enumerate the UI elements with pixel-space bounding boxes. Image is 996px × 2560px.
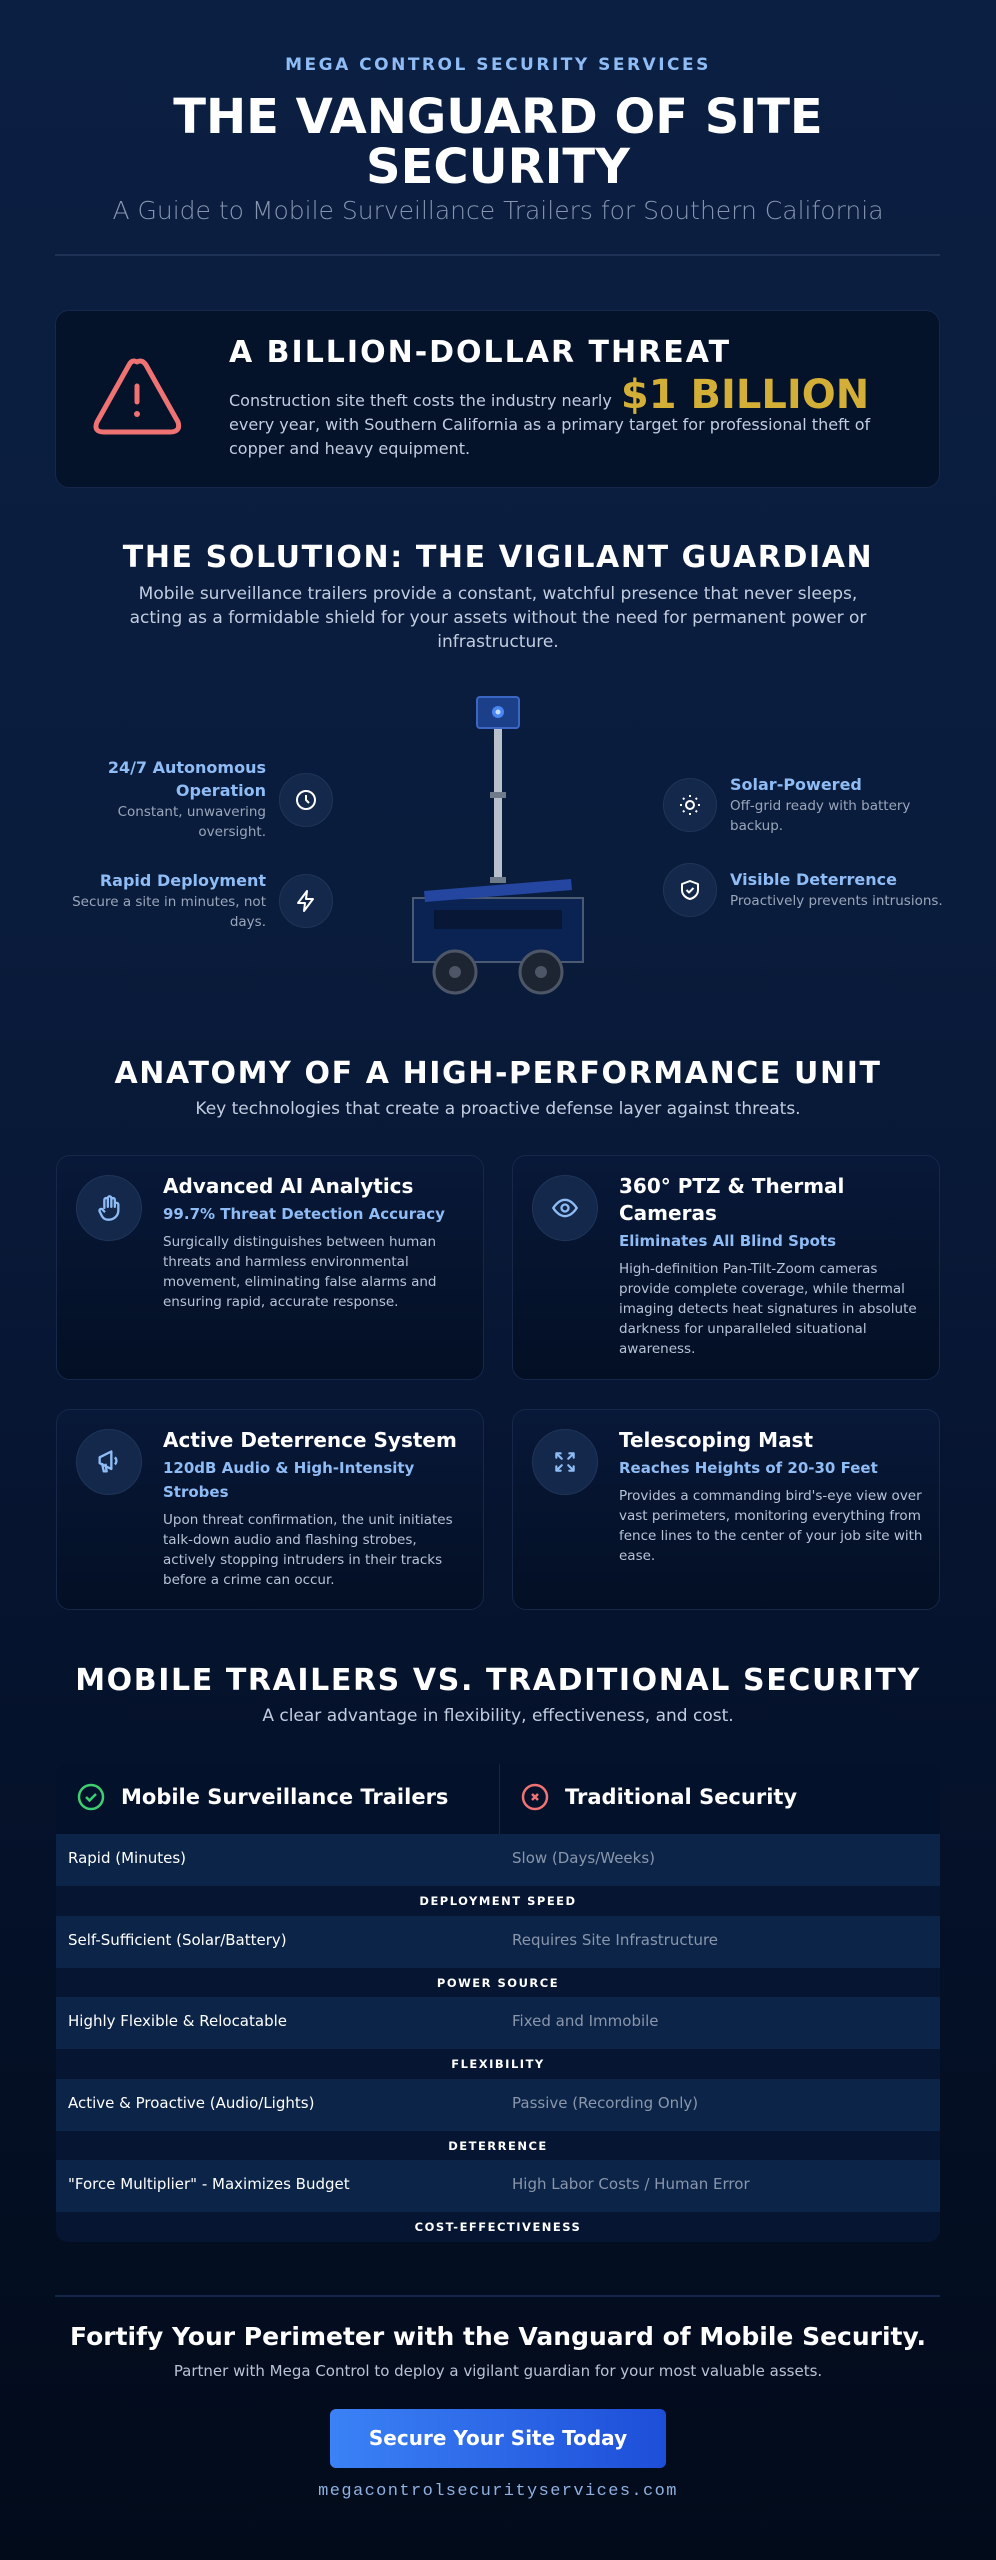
CTA heading: Fortify Your Perimeter with the Vanguard of Mobile Security. (70, 2322, 926, 2351)
card: cameras: Cameras (619, 1201, 717, 1225)
feature: deterrence: Visible Deterrence (730, 870, 897, 889)
feature: solar (730, 775, 910, 834)
text: Highly Flexible & Relocatable (68, 2012, 287, 2030)
heading: anatomy: ANATOMY OF A HIGH-PERFORMANCE UNIT (114, 1056, 882, 1091)
card: cameras: High-definition Pan-Tilt-Zoom cameras provide complete coverage, while thermal imaging detects heat signatures in absolute darkness for unparalleled situational awareness. (619, 1261, 917, 1357)
feature: 24/7: Constant, unwavering oversight. (118, 804, 266, 840)
icon: shield (663, 863, 717, 917)
feature: rapid (72, 871, 266, 930)
CTA subtitle: Partner with Mega Control to deploy a vigilant guardian for your most valuable assets. (174, 2362, 822, 2380)
card: AI analytics: 99.7% Threat Detection Accuracy (163, 1205, 445, 1223)
heading: solution: THE SOLUTION: THE VIGILANT GUARDIAN (123, 540, 873, 575)
card: mast: Reaches Heights of 20-30 Feet (619, 1459, 878, 1477)
card: deterrence (56, 1409, 484, 1610)
text: Rapid (Minutes) (68, 1849, 186, 1867)
card: cameras (512, 1155, 940, 1380)
feature: rapid: Rapid Deployment (100, 871, 266, 890)
header: mobile: Mobile Surveillance Trailers (121, 1785, 448, 1809)
feature: 24/7: 24/7 Autonomous Operation (108, 758, 266, 800)
card: mast: Telescoping Mast (619, 1428, 813, 1452)
feature: deterrence: Proactively prevents intrusions. (730, 893, 943, 909)
text: Requires Site Infrastructure (512, 1931, 718, 1949)
text: DETERRENCE (448, 2139, 548, 2153)
card: AI analytics: Surgically distinguishes between human threats and harmless environmental movement, eliminating false alarms and ensuring rapid, accurate response. (163, 1234, 436, 1310)
card: cameras: Eliminates All Blind Spots (619, 1232, 836, 1250)
body text (229, 372, 870, 458)
card: deterrence: Upon threat confirmation, the unit initiates talk-down audio and flashing strobes, actively stopping intruders in their tracks before a crime can occur. (163, 1512, 453, 1588)
icon: expand (532, 1429, 598, 1495)
card: deterrence: 120dB Audio & High-Intensity Strobes (163, 1459, 414, 1501)
card: cameras: 360° PTZ & Thermal (619, 1174, 844, 1198)
body text: Construction site theft costs the industry nearly $1 BILLION (229, 372, 869, 418)
card: AI analytics (56, 1155, 484, 1380)
text: COST-EFFECTIVENESS (415, 2220, 581, 2234)
feature: solar: Off-grid ready with battery backup. (730, 798, 910, 834)
website url: megacontrolsecurityservices.com (318, 2482, 678, 2501)
header: traditional: Traditional Security (565, 1785, 797, 1809)
text: High Labor Costs / Human Error (512, 2175, 750, 2193)
card: AI analytics: Advanced AI Analytics (163, 1174, 413, 1198)
icon: hand (76, 1175, 142, 1241)
icon: eye (532, 1175, 598, 1241)
icon: sun (663, 778, 717, 832)
text: FLEXIBILITY (451, 2057, 545, 2071)
comparison subtitle: A clear advantage in flexibility, effectiveness, and cost. (262, 1706, 734, 1726)
body text: every year, with Southern California as a primary target for professional theft of copper and heavy equipment. (229, 415, 870, 458)
text: Fixed and Immobile (512, 2012, 659, 2030)
solution text: Mobile surveillance trailers provide a constant, watchful presence that never sleeps, acting as a formidable shield for your assets without the need for permanent power or infrastructure. (130, 584, 866, 652)
text: Slow (Days/Weeks) (512, 1849, 655, 1867)
text: Self-Sufficient (Solar/Battery) (68, 1931, 287, 1949)
title: SECURITY (366, 139, 630, 195)
comparison table (78, 1764, 797, 1834)
button (330, 2409, 666, 2468)
icon: warning (93, 358, 182, 434)
title (173, 89, 823, 195)
icon: clock (279, 773, 333, 827)
text: "Force Multiplier" - Maximizes Budget (68, 2175, 350, 2193)
feature: rapid: Secure a site in minutes, not days. (72, 894, 266, 930)
eyebrow: MEGA CONTROL SECURITY SERVICES (285, 55, 711, 75)
card: mast (512, 1409, 940, 1610)
title: THE VANGUARD OF SITE (173, 89, 823, 145)
text: DEPLOYMENT SPEED (419, 1894, 577, 1908)
heading: A BILLION-DOLLAR THREAT (229, 335, 731, 370)
text: Active & Proactive (Audio/Lights) (68, 2094, 314, 2112)
text: POWER SOURCE (437, 1976, 559, 1990)
anatomy subtitle: Key technologies that create a proactive defense layer against threats. (195, 1099, 801, 1119)
button: Secure Your Site Today (369, 2426, 627, 2450)
heading: comparison: MOBILE TRAILERS VS. TRADITIONAL SECURITY (75, 1663, 921, 1698)
feature: solar: Solar-Powered (730, 775, 862, 794)
panel: threat (55, 310, 940, 488)
icon: bolt (279, 874, 333, 928)
icon: megaphone (76, 1429, 142, 1495)
trailer illustration (412, 696, 584, 994)
subtitle: A Guide to Mobile Surveillance Trailers for Southern California (112, 196, 884, 225)
text: Passive (Recording Only) (512, 2094, 698, 2112)
card: deterrence: Active Deterrence System (163, 1428, 457, 1452)
card: mast: Provides a commanding bird's-eye view over vast perimeters, monitoring everything from fence lines to the center of your job site with ease. (619, 1488, 922, 1564)
feature: 24/7 (108, 758, 266, 840)
feature: deterrence (730, 870, 943, 909)
